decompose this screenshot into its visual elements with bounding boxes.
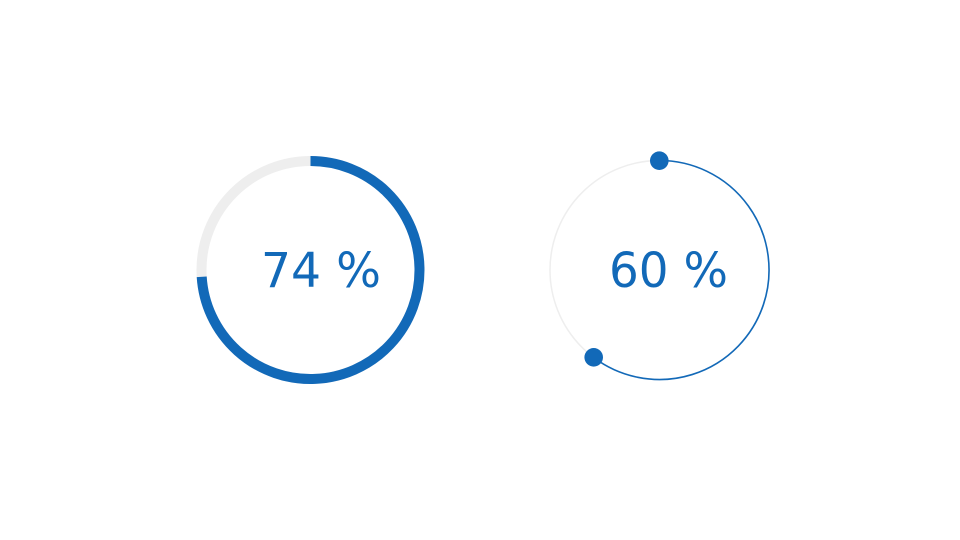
ring progress 60 percent (594, 160, 769, 379)
label: 60 %: 60 % (609, 243, 728, 299)
marker: end dot (584, 348, 603, 367)
ring track (202, 161, 420, 379)
label: 74 %: 74 % (261, 243, 381, 299)
ring track (550, 160, 769, 380)
chart: 60 percent thin ring (550, 151, 769, 380)
ring progress 74 percent (202, 161, 419, 379)
marker: start dot (650, 151, 669, 170)
chart: 74 percent thick ring (202, 161, 420, 379)
